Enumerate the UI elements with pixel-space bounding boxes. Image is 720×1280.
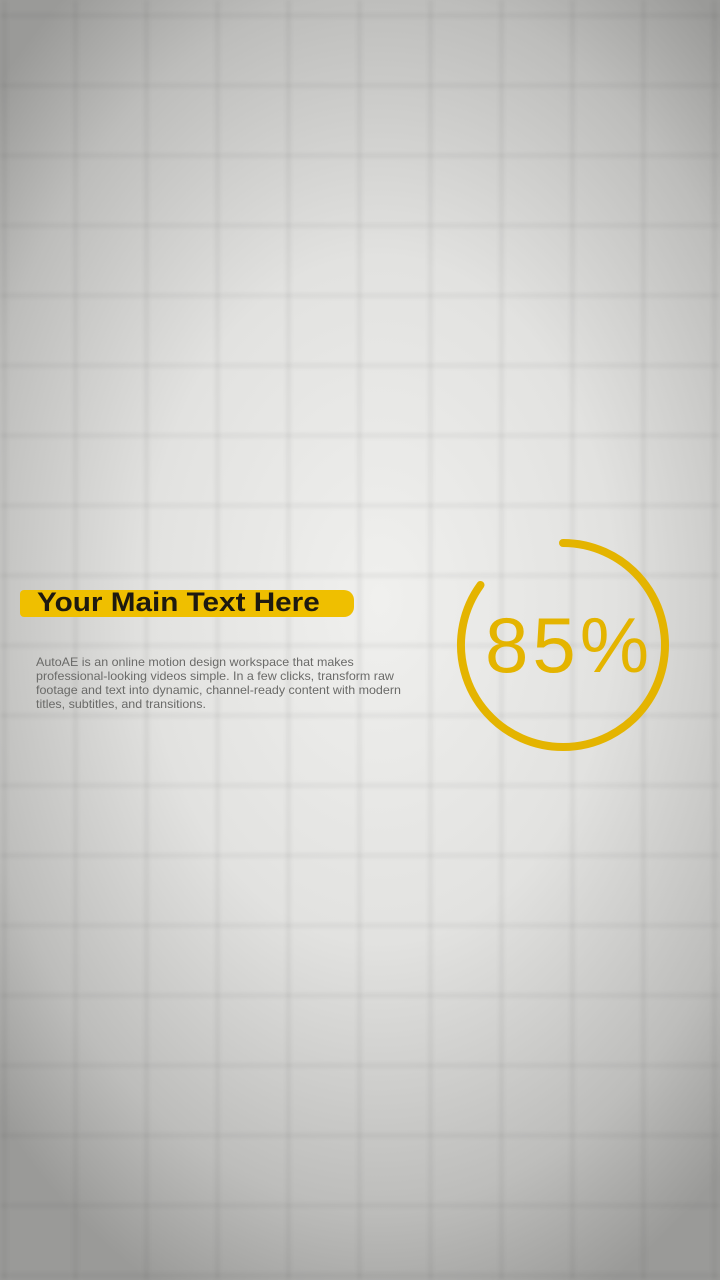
chart: 85% progress ring bbox=[456, 539, 669, 751]
heading: highlighted title: Your Main Text Here bbox=[37, 587, 320, 617]
chart: 85% progress ring: 85% bbox=[485, 601, 653, 689]
text block: description: titles, subtitles, and transitions. bbox=[36, 697, 206, 711]
text block: description: footage and text into dynamic, channel-ready content with modern bbox=[36, 683, 401, 697]
text block: description: professional-looking videos simple. In a few clicks, transform raw bbox=[36, 669, 394, 683]
text block: description bbox=[36, 655, 401, 711]
text block: description: AutoAE is an online motion design workspace that makes bbox=[36, 655, 354, 669]
